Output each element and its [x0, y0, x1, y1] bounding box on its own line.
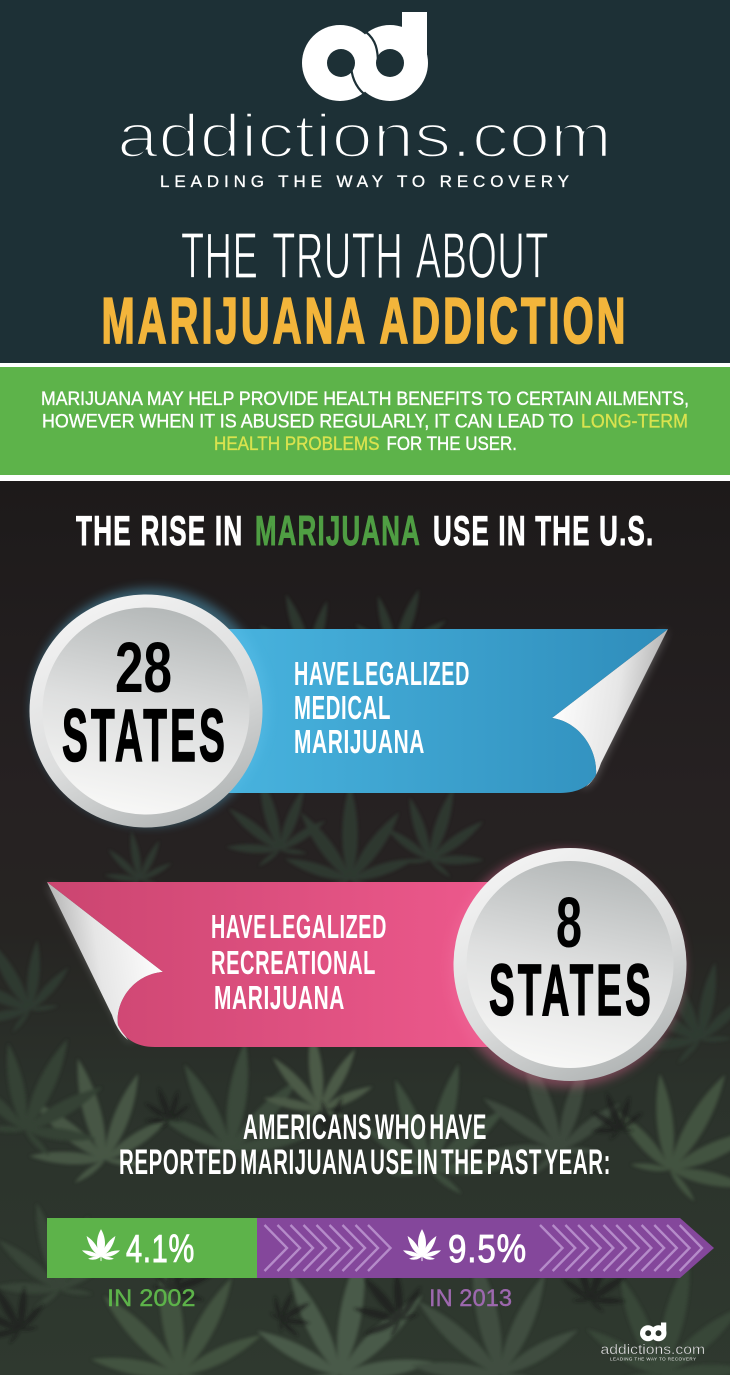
purple arrow: 2013: [257, 1218, 714, 1278]
value: 9.5%: [448, 1228, 527, 1271]
label: HAVE LEGALIZED: [211, 908, 387, 945]
progress arrow chart: [47, 1218, 714, 1312]
ribbon: blue: [190, 629, 668, 793]
year label 2013: IN 2013: [429, 1285, 512, 1312]
wordmark: addictions.com: [117, 102, 612, 170]
ribbon: pink: [47, 882, 520, 1047]
wordmark: addictions.com: [600, 1342, 705, 1357]
tagline: LEADING THE WAY TO RECOVERY: [160, 172, 569, 191]
intro text: FOR THE USER.: [386, 433, 517, 455]
panel: 28 states medical: [30, 588, 668, 828]
label: MEDICAL: [294, 689, 391, 726]
intro text: HOWEVER WHEN IT IS ABUSED REGULARLY, IT CAN LEAD TO: [42, 410, 574, 432]
heading: americans who have reported use: AMERICANS WHO HAVE: [243, 1108, 487, 1147]
number: 8: [556, 884, 582, 963]
circle badge: [447, 848, 686, 1087]
title: [102, 219, 628, 357]
value: 4.1%: [126, 1228, 195, 1271]
photo background: cannabis plant: [0, 481, 730, 1375]
tagline: LEADING THE WAY TO RECOVERY: [610, 1356, 696, 1362]
unit: STATES: [62, 694, 228, 777]
label: RECREATIONAL: [211, 944, 376, 981]
icon: ad infinity mark: [302, 12, 428, 101]
green bar: 2002: [47, 1218, 257, 1278]
logo: addictions.com: [117, 12, 612, 191]
label: HAVE LEGALIZED: [294, 655, 470, 692]
intro text: [41, 388, 689, 455]
circle badge: [30, 588, 269, 828]
intro text: LONG-TERM: [581, 410, 688, 432]
heading: the rise in marijuana use: [76, 507, 654, 554]
white divider and intro band: [0, 363, 730, 481]
label: [294, 655, 470, 760]
icon: mark: [640, 1322, 666, 1341]
heading: americans who have reported use: [119, 1108, 611, 1182]
heading: the rise in marijuana use: THE RISE IN: [76, 507, 244, 554]
heading: the rise in marijuana use: MARIJUANA: [255, 507, 421, 554]
icon: leaf: [403, 1229, 441, 1261]
panel: 8 states recreational: [47, 848, 686, 1087]
icon: leaf: [82, 1229, 120, 1261]
intro text: HEALTH PROBLEMS: [214, 433, 380, 455]
label: MARIJUANA: [294, 723, 425, 760]
label: MARIJUANA: [214, 979, 345, 1016]
small footer logo: [600, 1322, 705, 1362]
year label 2002: IN 2002: [107, 1285, 196, 1312]
number: 28: [115, 629, 172, 708]
label: [211, 908, 387, 1016]
header background: [0, 0, 730, 363]
